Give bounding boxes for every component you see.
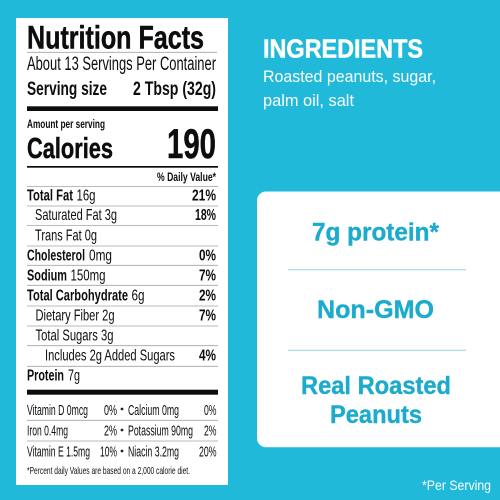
row: total fat: 16g [76,188,96,204]
row: added sugars: Includes 2g Added Sugars [45,348,175,365]
row: vitamin D and calcium: Calcium 0mg [128,402,179,419]
calories row: 190 [167,120,216,167]
row: dietary fiber [36,308,216,325]
row: cholesterol: 0mg [89,248,112,265]
text: ingredients list [263,67,436,110]
calories row [27,120,216,167]
row: vitamin E and niacin: Niacin 3.2mg [128,444,179,461]
row: total fat: Total Fat [27,188,73,204]
row: total carbohydrate: 2% [199,288,216,305]
calories row: Calories [27,133,113,165]
vitamins and minerals table [27,402,218,461]
row: vitamin D and calcium [27,402,216,419]
row: sodium: Sodium [27,268,67,285]
row: iron and potassium: 2% [104,422,117,440]
claim: Non-GMO: Non-GMO [317,296,434,324]
row: vitamin D and calcium: Vitamin D 0mcg [27,402,88,419]
row: cholesterol: Cholesterol [27,248,85,265]
serving size row [27,79,216,100]
row: cholesterol [27,248,216,265]
row: total sugars: Total Sugars 3g [36,328,114,345]
row: vitamin E and niacin [27,444,216,461]
row: vitamin E and niacin: 20% [199,444,216,461]
row: dietary fiber: Dietary Fiber 2g [36,308,114,325]
heading: ingredients: INGREDIENTS [263,34,423,64]
text: ingredients list: palm oil, salt [263,91,354,110]
heading: Nutrition Facts: Nutrition Facts [27,20,204,56]
row: trans fat: Trans Fat 0g [35,228,97,244]
row: iron and potassium: Potassium 90mg [128,422,193,440]
row: vitamin E and niacin: 10% [100,444,117,461]
row: total fat [27,188,216,204]
claim: real roasted peanuts: Peanuts [330,401,422,429]
row: total fat: 21% [192,188,216,204]
nutrient rows [27,188,218,385]
row: iron and potassium: Iron 0.4mg [27,422,68,440]
row: saturated fat: 18% [195,207,216,224]
row: vitamin D and calcium: 0% [104,402,117,419]
row: vitamin E and niacin: Vitamin E 1.5mg [27,444,90,461]
text: ingredients list: Roasted peanuts, sugar, [263,67,436,86]
row: saturated fat: Saturated Fat 3g [35,207,117,224]
row: total carbohydrate: Total Carbohydrate [27,288,128,305]
footnote: percent daily values: *Percent daily Values are based on a 2,000 calorie diet. [27,465,190,477]
claim: real roasted peanuts: Real Roasted [301,372,451,400]
row: dietary fiber: 7% [199,308,216,325]
text: percent daily value header: % Daily Value* [157,172,216,184]
row: protein: Protein [27,368,64,385]
claim: real roasted peanuts [301,372,451,429]
panel: nutrition facts label [16,18,228,485]
footnote: per serving: *Per Serving [422,478,491,493]
text: amount per serving: Amount per serving [27,119,105,131]
row: protein: 7g [68,368,80,385]
row: sodium [27,268,216,285]
row: sodium: 7% [199,268,216,285]
row: iron and potassium: 2% [204,422,216,440]
serving size row: 2 Tbsp (32g) [133,79,216,100]
serving size row: Serving size [27,79,107,100]
row: sodium: 150mg [70,268,106,285]
row: saturated fat [35,207,216,224]
text: servings per container: About 13 Servings Per Container [27,54,216,75]
row: added sugars: 4% [199,348,216,365]
row: vitamin D and calcium: 0% [204,402,216,419]
row: total carbohydrate: 6g [132,288,144,305]
row: iron and potassium [27,422,216,440]
row: cholesterol: 0% [199,248,216,265]
claim: 7g protein: 7g protein* [312,219,439,247]
panel: product claims card [257,192,500,447]
